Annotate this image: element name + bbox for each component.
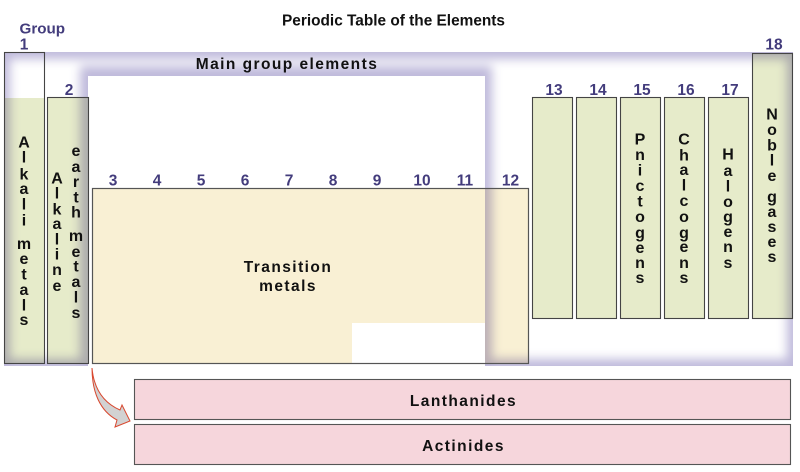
label: earth metals: l xyxy=(74,290,78,306)
label: noble gases: s xyxy=(768,249,777,266)
panel: transition metals xyxy=(92,188,529,364)
arrow: transition metals to lanthanides and actinides xyxy=(92,368,130,427)
label: earth metals: e xyxy=(72,143,81,160)
label: alkali metals: A xyxy=(18,134,30,152)
group label: Group xyxy=(20,20,65,38)
label: earth metals: h xyxy=(71,204,81,222)
label: halogens: o xyxy=(723,194,733,211)
label: noble gases: g xyxy=(767,189,777,206)
label: alkaline: k xyxy=(53,202,62,218)
main group label: Main group elements xyxy=(196,56,378,73)
label: earth metals: m xyxy=(69,228,83,245)
label: alkaline: e xyxy=(53,278,62,295)
label: chalcogens: C xyxy=(678,132,690,148)
label: pnictogens: n xyxy=(635,147,645,164)
group numbers: 15 xyxy=(633,82,651,99)
label: pnictogens: n xyxy=(635,255,645,272)
group numbers: 13 xyxy=(545,82,563,99)
label: earth metals: s xyxy=(72,305,81,322)
label: alkali metals: i xyxy=(22,212,26,230)
label: noble gases: b xyxy=(767,138,777,154)
panel: group 13 xyxy=(532,98,572,318)
label: alkaline: i xyxy=(55,246,59,264)
label: chalcogens: o xyxy=(679,209,689,226)
group numbers: 8 xyxy=(329,172,338,190)
label: alkali metals: a xyxy=(20,181,29,198)
label: pnictogens: t xyxy=(637,194,643,210)
label: noble gases: e xyxy=(768,168,777,185)
label: pnictogens: P xyxy=(635,132,646,148)
panel: group 16 xyxy=(664,98,704,318)
label: alkali metals: t xyxy=(21,266,27,284)
label: alkaline: a xyxy=(53,216,62,233)
panel: group 1 alkali metals column xyxy=(4,52,45,364)
label: pnictogens: e xyxy=(636,240,645,257)
label: alkali metals: l xyxy=(22,196,26,214)
label: noble gases: l xyxy=(770,152,774,170)
group numbers: 12 xyxy=(502,172,519,190)
label: alkaline: l xyxy=(55,232,59,248)
label: alkali metals: e xyxy=(20,251,29,268)
label: alkaline: n xyxy=(52,262,62,279)
label: chalcogens: c xyxy=(680,193,689,210)
label: pnictogens: g xyxy=(635,225,645,242)
label: alkaline: A xyxy=(51,170,63,188)
group numbers: 18 xyxy=(765,36,783,54)
label: alkali metals: m xyxy=(17,236,31,253)
group numbers: 14 xyxy=(589,82,607,99)
panel: actinides: Actinides xyxy=(422,438,505,455)
label: chalcogens: l xyxy=(682,178,686,194)
label: alkali metals: s xyxy=(20,312,29,329)
label: alkaline: l xyxy=(55,186,59,202)
transition metals label: metals xyxy=(259,278,317,295)
label: alkali metals: a xyxy=(20,282,29,299)
label: chalcogens: s xyxy=(680,270,689,287)
panel: group 14 xyxy=(576,98,616,318)
panel: actinides xyxy=(134,424,790,464)
title: Periodic Table of the Elements xyxy=(282,12,505,30)
label: pnictogens: i xyxy=(638,162,642,180)
panel: group 15 xyxy=(620,98,660,318)
label: alkali metals: l xyxy=(22,298,26,314)
group numbers: 3 xyxy=(109,172,118,190)
label: noble gases: o xyxy=(767,122,777,139)
label: noble gases: e xyxy=(768,234,777,251)
label: earth metals: t xyxy=(73,190,79,206)
label: chalcogens: e xyxy=(680,239,689,256)
label: alkali metals: l xyxy=(22,150,26,166)
group numbers: 4 xyxy=(153,172,162,190)
panel: group 17 xyxy=(708,98,748,318)
group numbers: 10 xyxy=(413,172,431,190)
label: earth metals: a xyxy=(72,159,81,176)
label: halogens: H xyxy=(722,146,734,164)
transition metals label: Transition xyxy=(244,259,332,276)
label: noble gases: a xyxy=(768,204,777,221)
label: halogens: e xyxy=(724,224,733,241)
label: alkali metals: k xyxy=(20,166,29,184)
label: earth metals: r xyxy=(73,174,79,191)
label: halogens: s xyxy=(724,255,733,272)
group numbers: 2 xyxy=(65,82,73,99)
group numbers: 9 xyxy=(373,172,382,190)
label: earth metals: e xyxy=(72,244,81,261)
group numbers: 17 xyxy=(721,82,739,99)
label: noble gases: N xyxy=(766,106,778,124)
label: earth metals: a xyxy=(72,274,81,291)
group numbers: 16 xyxy=(677,82,695,99)
panel: lanthanides xyxy=(134,380,790,420)
label: pnictogens: o xyxy=(635,209,645,226)
group numbers: 1 xyxy=(20,36,29,54)
label: chalcogens: a xyxy=(680,162,689,179)
group numbers xyxy=(20,36,783,190)
label: pnictogens: s xyxy=(636,270,645,287)
label: halogens: n xyxy=(723,239,733,256)
label: chalcogens: g xyxy=(679,225,689,242)
label: pnictogens: c xyxy=(636,178,645,195)
group numbers: 11 xyxy=(457,172,474,190)
panel: group 2 alkaline earth column xyxy=(47,97,89,364)
panel: group 18 noble gases column xyxy=(752,53,793,318)
group numbers: 7 xyxy=(285,172,293,190)
label: halogens: g xyxy=(723,209,733,226)
main group elements glow band xyxy=(0,48,800,370)
group numbers: 6 xyxy=(241,172,250,190)
label: halogens: a xyxy=(724,163,733,180)
label: noble gases: s xyxy=(768,219,777,236)
label: chalcogens: n xyxy=(679,255,689,272)
label: chalcogens: h xyxy=(679,148,689,164)
label: earth metals: t xyxy=(73,258,79,276)
label: halogens: l xyxy=(726,178,730,196)
panel: lanthanides: Lanthanides xyxy=(410,393,517,410)
group numbers: 5 xyxy=(197,172,206,190)
